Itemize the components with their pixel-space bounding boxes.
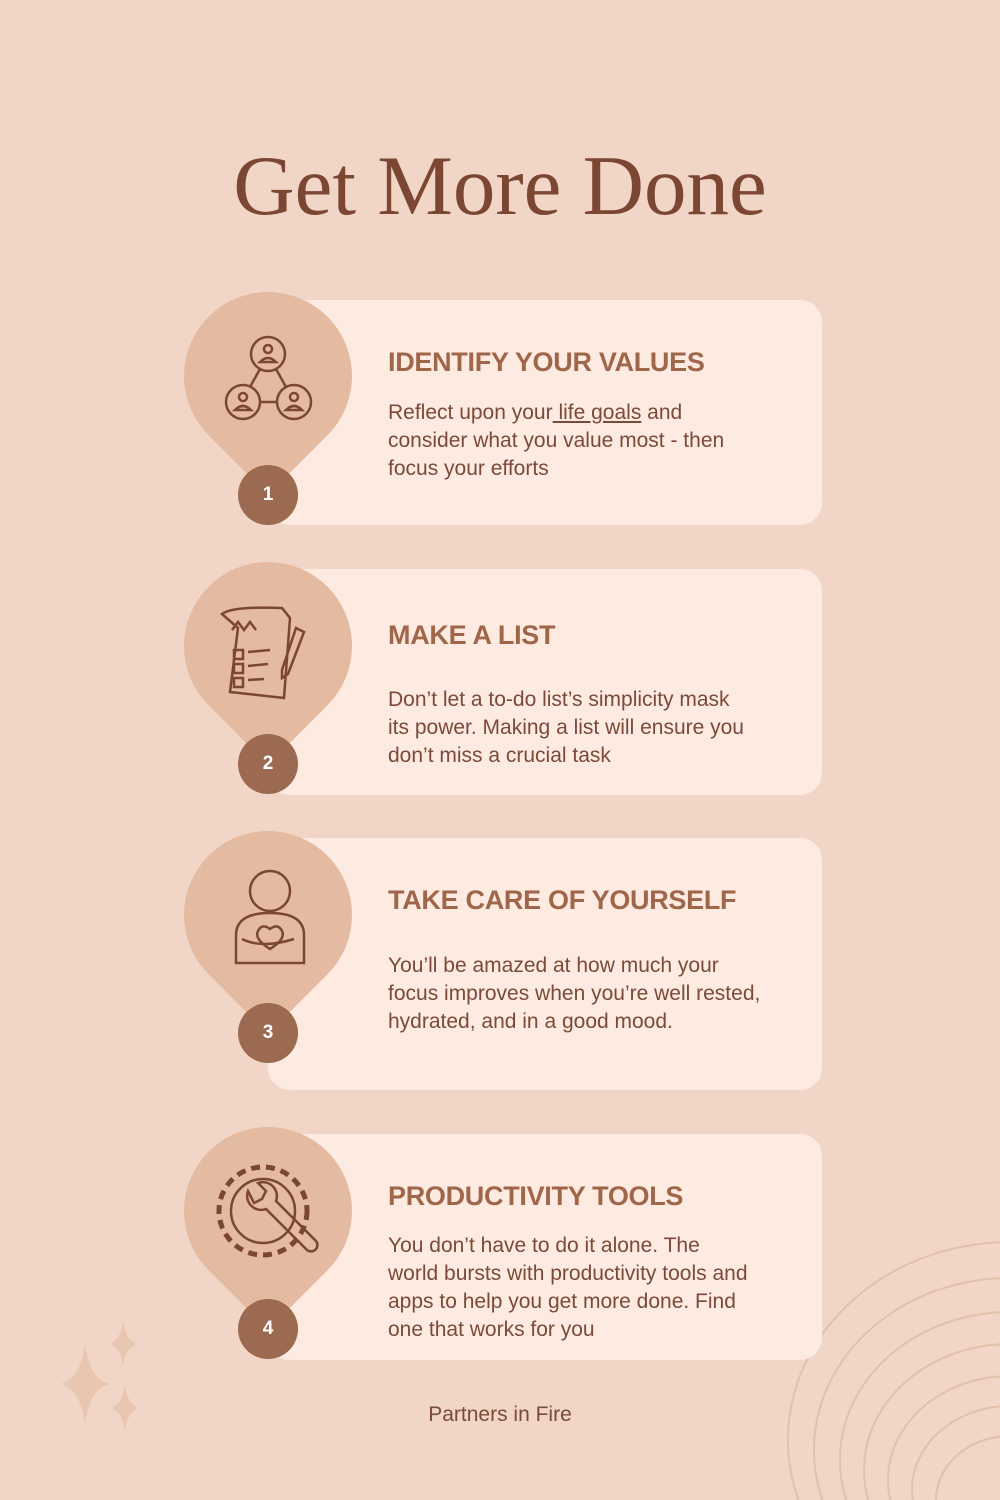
text 3: focus improves when you’re well rested, (388, 982, 760, 1005)
text 4: apps to help you get more done. Find (388, 1290, 736, 1313)
icon 3: self care (184, 831, 352, 1012)
text 4 (388, 1234, 748, 1341)
text 1: focus your efforts (388, 457, 549, 480)
text 1 (388, 401, 724, 480)
text 2: its power. Making a list will ensure you (388, 716, 744, 739)
text 3: You’ll be amazed at how much your (388, 954, 719, 977)
text 1: Reflect upon your life goals and (388, 401, 682, 424)
text 3: hydrated, and in a good mood. (388, 1010, 673, 1033)
text 4: You don’t have to do it alone. The (388, 1234, 700, 1257)
number 4 (238, 1299, 298, 1359)
card 3 background (268, 838, 822, 1090)
heading 3: TAKE CARE OF YOURSELF (388, 885, 736, 915)
card 1 background (268, 300, 822, 525)
decoration: arcs (787, 1241, 1000, 1500)
text 4: one that works for you (388, 1318, 595, 1341)
text 1: consider what you value most - then (388, 429, 724, 452)
footer: Partners in Fire (428, 1403, 572, 1426)
icon 1: people network (184, 292, 352, 474)
number 1 (238, 465, 298, 525)
heading 2: MAKE A LIST (388, 620, 555, 650)
heading 4: PRODUCTIVITY TOOLS (388, 1181, 683, 1211)
title: Get More Done (233, 139, 767, 233)
number 2 (238, 734, 298, 794)
text 2: don’t miss a crucial task (388, 744, 611, 767)
text 2: Don’t let a to-do list’s simplicity mask (388, 688, 730, 711)
heading 1: IDENTIFY YOUR VALUES (388, 347, 705, 377)
text 4: world bursts with productivity tools and (388, 1262, 748, 1285)
number 3 (238, 1003, 298, 1063)
text 2 (388, 688, 744, 767)
icon 4: gear and wrench (184, 1127, 352, 1308)
number 2: 2 (263, 753, 273, 774)
text 3 (388, 954, 760, 1033)
icon 2: checklist (184, 562, 352, 743)
decoration: sparkles (60, 1322, 138, 1430)
number 1: 1 (263, 484, 273, 505)
number 4: 4 (263, 1318, 273, 1339)
number 3: 3 (263, 1022, 273, 1043)
card 2 background (268, 569, 822, 795)
card 4 background (268, 1134, 822, 1360)
